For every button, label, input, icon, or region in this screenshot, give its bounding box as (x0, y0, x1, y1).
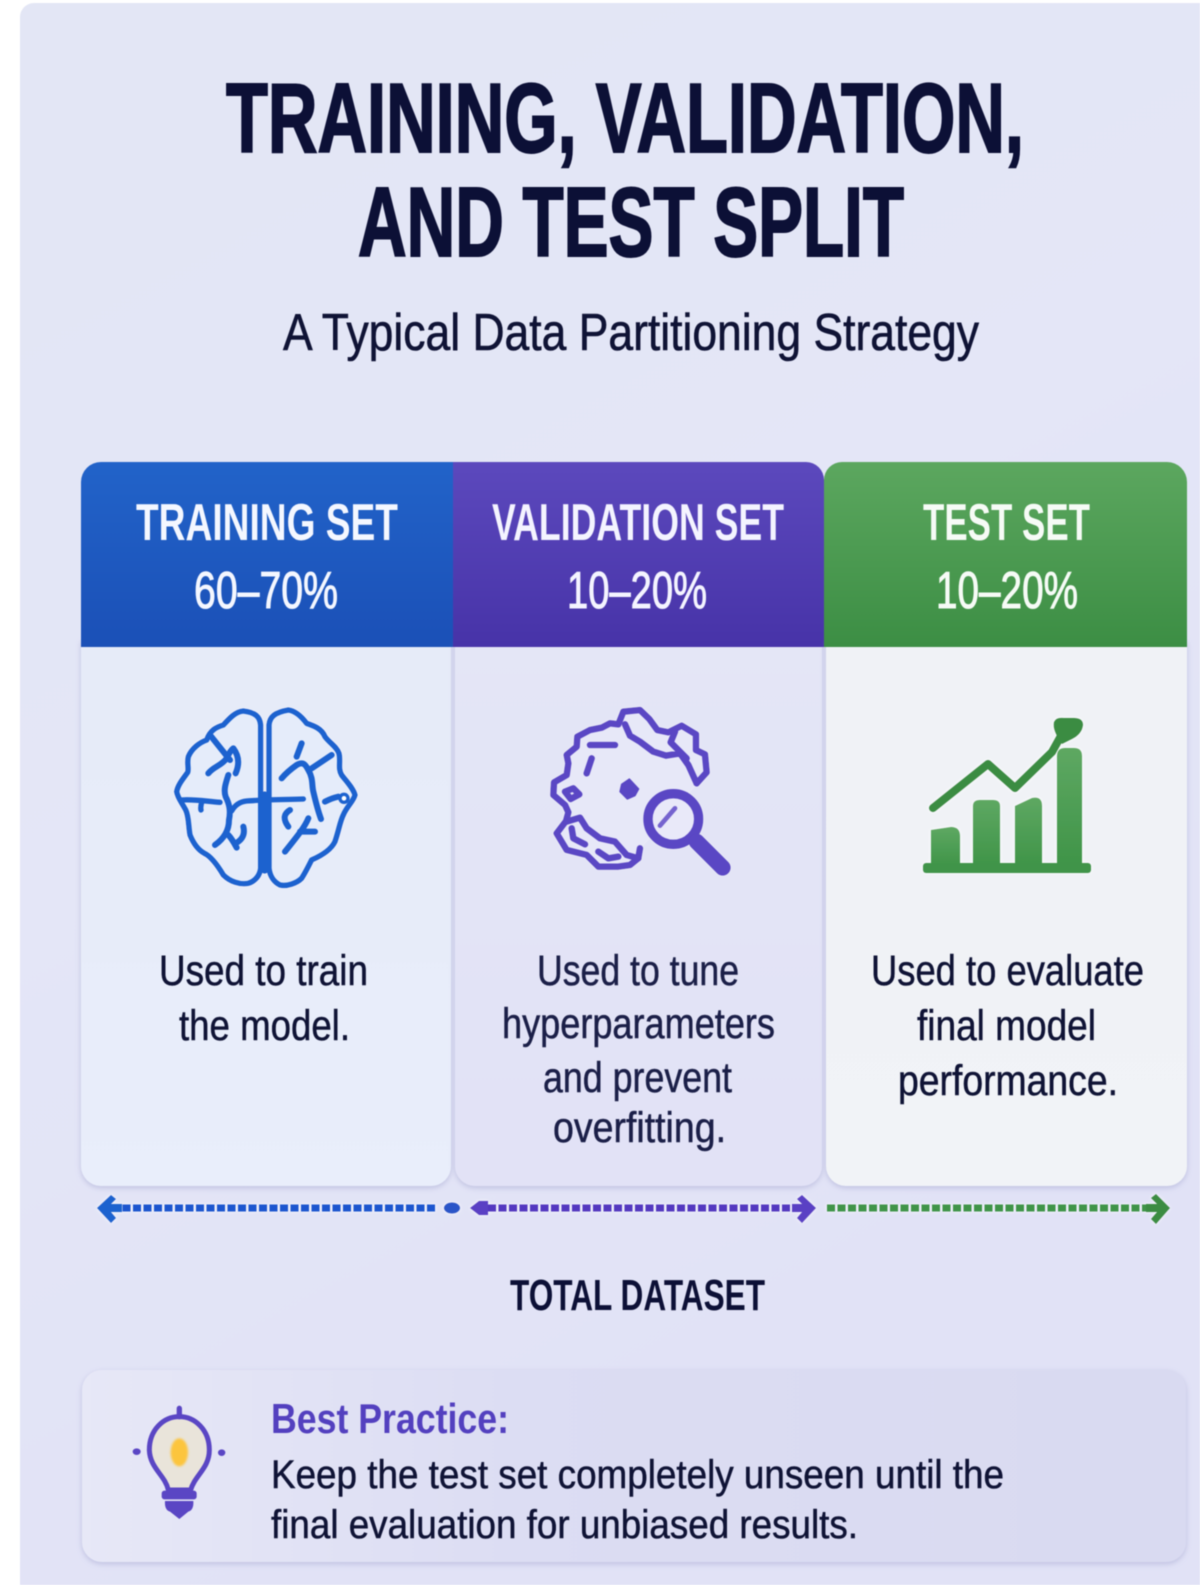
validation description: overfitting. (553, 1104, 726, 1152)
icon: bar chart with rising line (923, 718, 1091, 873)
test description: Used to evaluate (871, 947, 1144, 995)
panel: training set (81, 462, 453, 1186)
validation header (453, 462, 824, 647)
title: AND TEST SPLIT (358, 167, 904, 277)
training card body (81, 640, 451, 1186)
validation heading: VALIDATION SET (492, 494, 784, 552)
test header (824, 462, 1187, 647)
training description (159, 947, 368, 1050)
test description (871, 947, 1144, 1105)
subtitle: A Typical Data Partitioning Strategy (283, 304, 979, 362)
callout heading: Best Practice: (271, 1395, 509, 1442)
test heading: TEST SET (923, 494, 1090, 552)
validation description: hyperparameters (502, 1000, 775, 1048)
callout text: Keep the test set completely unseen until the (271, 1453, 1004, 1497)
test card body (826, 640, 1187, 1186)
icon: brain (177, 710, 355, 885)
test percentage: 10–20% (936, 562, 1078, 620)
callout text: final evaluation for unbiased results. (271, 1503, 858, 1547)
icon: light bulb (133, 1408, 225, 1519)
training percentage: 60–70% (194, 562, 338, 620)
validation description: Used to tune (537, 947, 739, 995)
title (226, 63, 1024, 277)
test description: performance. (898, 1057, 1118, 1105)
validation description (502, 947, 775, 1152)
panel: validation set (453, 462, 824, 1186)
callout text (271, 1453, 1004, 1547)
validation percentage: 10–20% (567, 562, 707, 620)
arrow: training segment (97, 1195, 460, 1223)
arrow: validation segment (470, 1195, 816, 1223)
callout: best practice (82, 1370, 1186, 1562)
arrow: test segment (827, 1194, 1170, 1224)
validation card body (455, 640, 822, 1186)
training description: Used to train (159, 947, 368, 995)
training description: the model. (179, 1002, 350, 1050)
icon: gear with magnifier (553, 710, 723, 868)
validation description: and prevent (543, 1054, 732, 1102)
training header (81, 462, 453, 647)
callout background (82, 1370, 1186, 1562)
panel: test set (824, 462, 1187, 1186)
total dataset label: TOTAL DATASET (510, 1271, 765, 1320)
arrow: total dataset span (97, 1194, 1170, 1224)
test description: final model (917, 1002, 1096, 1050)
training heading: TRAINING SET (136, 494, 398, 552)
